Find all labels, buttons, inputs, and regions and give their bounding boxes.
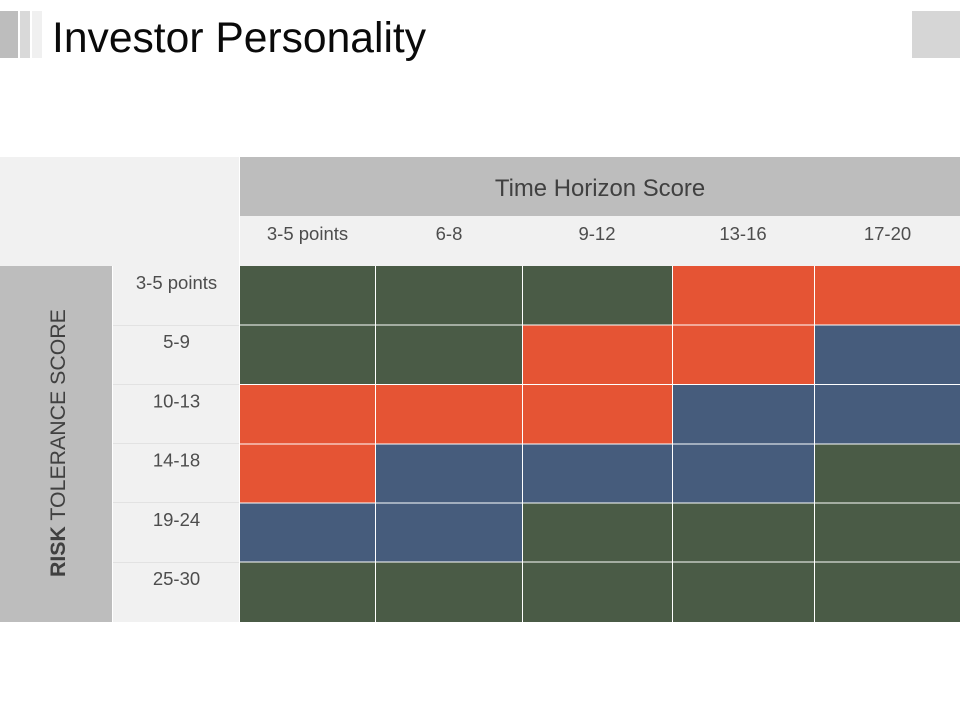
row header: risk tolerance (0, 266, 112, 622)
row labels: 5-9 (163, 331, 190, 352)
column labels: 17-20 (864, 223, 911, 244)
column header: time horizon (240, 157, 960, 216)
column labels: 6-8 (436, 223, 462, 244)
row 3-5 points (240, 266, 960, 324)
empty corner panel (0, 157, 239, 266)
heatmap cells (240, 266, 960, 622)
row labels: 14-18 (153, 450, 200, 470)
table: investor personality matrix (0, 157, 960, 622)
row labels: 10-13 (153, 390, 200, 412)
row 10-13 (240, 385, 960, 444)
row 5-9 (240, 326, 960, 384)
column labels: 9-12 (578, 223, 616, 244)
row labels: 19-24 (153, 509, 200, 530)
column labels (240, 216, 960, 266)
row 14-18 (240, 444, 960, 502)
column header: time horizon: Time Horizon Score (495, 175, 705, 202)
row labels: 25-30 (153, 568, 200, 589)
row header: risk tolerance: RISK TOLERANCE SCORE (46, 309, 70, 577)
decorative title bars (0, 11, 42, 58)
row labels: 3-5 points (136, 272, 217, 293)
column labels: 3-5 points (267, 223, 348, 244)
row 25-30 (240, 562, 960, 622)
row 19-24 (240, 504, 960, 562)
title: Investor Personality (52, 14, 427, 62)
top right decorative block (912, 11, 960, 58)
row labels (113, 266, 239, 622)
column labels: 13-16 (719, 223, 767, 244)
